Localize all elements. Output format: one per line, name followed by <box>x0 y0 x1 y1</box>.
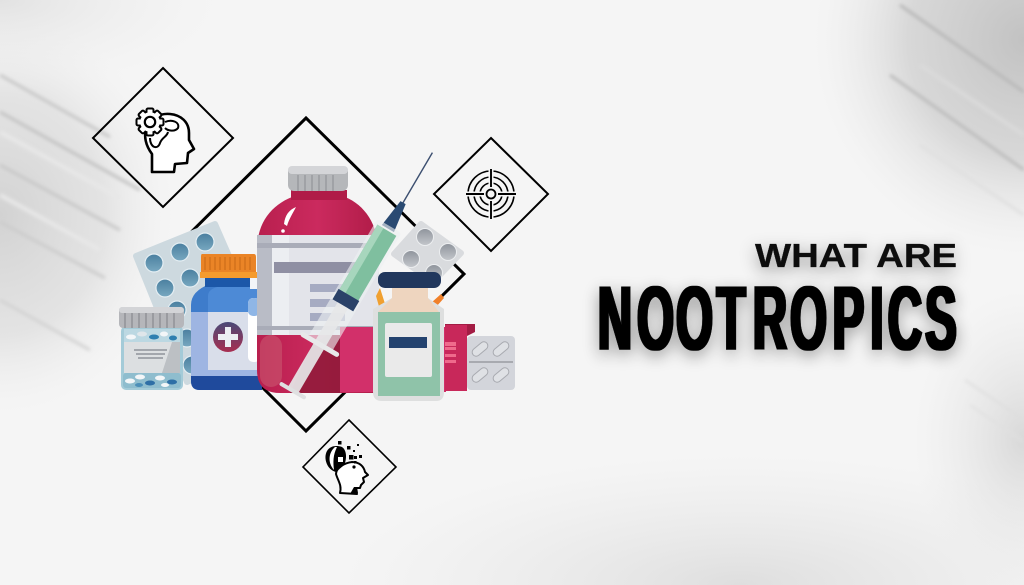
white tablet blister <box>467 336 515 390</box>
orange cap <box>200 254 257 278</box>
syringe <box>273 141 451 404</box>
icon: head with gear <box>136 108 194 172</box>
heading: nootropics: NOOTROPICS <box>598 268 957 370</box>
blue pill blister pack <box>136 224 268 382</box>
highlight bar <box>248 298 260 362</box>
small diamond: open mind head <box>303 420 396 513</box>
grey pill blister pack <box>394 224 461 282</box>
icon: head with particles <box>325 441 368 494</box>
small capsule jar <box>119 307 184 390</box>
small diamond: target <box>434 138 548 251</box>
pink bottle <box>257 166 379 393</box>
grey cap <box>288 166 348 191</box>
navy label bar <box>389 337 427 348</box>
medical cross badge <box>213 322 243 352</box>
title <box>598 237 957 370</box>
blue bottle <box>191 254 262 390</box>
small diamond: brain and gear <box>93 68 233 207</box>
pink carton box <box>340 324 475 392</box>
large diamond outline <box>149 118 464 431</box>
heading: what are: WHAT ARE <box>755 237 957 274</box>
glass vial <box>373 272 444 401</box>
bottle label <box>257 235 379 335</box>
icon: crosshair target <box>465 168 517 220</box>
medicine group <box>119 141 515 404</box>
navy vial cap <box>378 272 441 288</box>
